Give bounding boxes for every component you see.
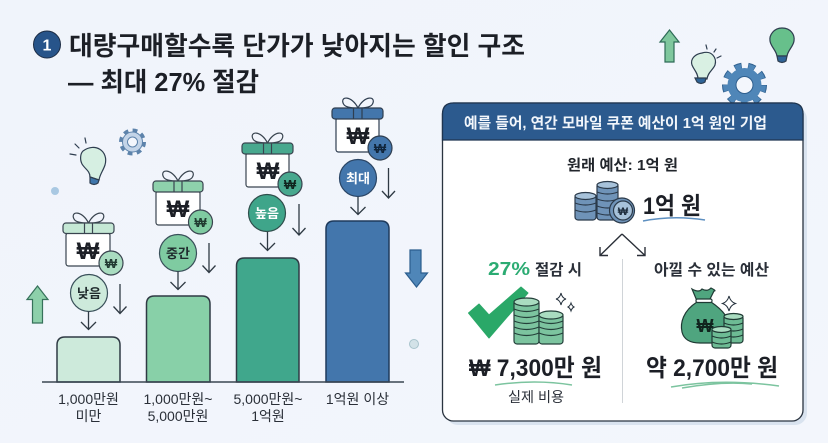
arrow: tier 2 <box>170 243 216 290</box>
icon: gift box: ₩ <box>167 196 190 223</box>
underline <box>671 382 779 388</box>
underline <box>643 218 705 221</box>
icon: coin stacks blue <box>575 182 634 223</box>
icon: sparkle <box>722 296 736 311</box>
arrow: tier 3 <box>260 204 306 250</box>
axis label: tier 1: 1,000만원 <box>58 391 119 407</box>
arrow: tier 1 <box>81 284 126 330</box>
amount: 100 million won: 1억 원 <box>643 193 701 220</box>
icon: check mark <box>468 287 528 338</box>
title line 2: — 최대 27% 절감 <box>68 67 259 97</box>
icon: gift box <box>332 98 392 160</box>
chart: discount tiers bar chart <box>42 221 404 424</box>
bar: tier 2 <box>146 296 210 382</box>
panel: example card <box>442 103 807 425</box>
icon: money bag: ₩ <box>696 316 714 336</box>
original budget label: 원래 예산: 1억 원 <box>567 157 678 174</box>
icon: sparkles <box>556 293 574 311</box>
icon: gift box: ₩ <box>374 141 387 156</box>
right column: savable budget <box>646 261 779 388</box>
gift tier 3 <box>242 133 306 250</box>
badge: high: 높음 <box>255 206 279 221</box>
icon: gear small <box>122 131 144 153</box>
badge: medium: 중간 <box>166 246 190 261</box>
card body <box>442 103 803 421</box>
underline <box>495 382 572 385</box>
heading: 27% savings: 27% <box>488 259 530 279</box>
axis label: tier 3: 5,000만원~ <box>234 391 302 407</box>
card shadow <box>446 107 807 425</box>
icon: light bulb left <box>70 138 106 184</box>
decorative dot left <box>51 187 59 195</box>
axis label: tier 1: 미만 <box>76 408 101 424</box>
icon: gift box <box>242 133 302 196</box>
gift tier 1 <box>63 213 126 330</box>
icon: coin stacks green <box>514 298 563 344</box>
caption: actual cost: 실제 비용 <box>508 389 564 405</box>
badge: maximum: 최대 <box>346 171 370 186</box>
arrow: split <box>600 234 645 256</box>
axis label: tier 4: 1억원 이상 <box>326 391 389 407</box>
icon: number badge: 1 <box>43 38 52 54</box>
left column: 27% savings <box>468 259 602 405</box>
gift tier 2 <box>153 171 216 290</box>
left column: 27% savings: 절감 시 <box>535 261 582 279</box>
axis label: tier 3: 1억원 <box>251 408 285 424</box>
icon: gift box: ₩ <box>105 256 118 271</box>
icon: arrow up top right <box>660 30 679 62</box>
icon: arrow down right <box>406 250 428 287</box>
bar: tier 4 <box>326 221 389 382</box>
icon: arrow up left <box>27 286 48 323</box>
icon: light bulb top middle <box>692 45 721 84</box>
bar: tier 3 <box>236 258 299 382</box>
icon: gift box <box>63 213 123 275</box>
gift tier 4 <box>332 98 395 214</box>
badge: low: 낮음 <box>77 286 101 301</box>
icon: gift box: ₩ <box>77 238 100 265</box>
icon: gift box: ₩ <box>257 158 280 185</box>
icon: number badge <box>34 31 60 58</box>
decorative ring <box>410 340 418 348</box>
bar: tier 1 <box>57 337 120 382</box>
amount: 73 million won: ₩ 7,300만 원 <box>469 355 602 382</box>
axis label: tier 2: 1,000만원~ <box>144 391 212 407</box>
title <box>34 31 525 97</box>
icon: gift box: ₩ <box>284 177 297 192</box>
amount: about 27 million won: 약 2,700만 원 <box>646 355 778 382</box>
title line 1: 대량구매할수록 단가가 낮아지는 할인 구조 <box>69 31 525 61</box>
icon: gift box: ₩ <box>194 215 207 230</box>
heading: savable budget: 아낄 수 있는 예산 <box>654 261 769 279</box>
icon: coin stacks blue: ₩ <box>618 206 629 218</box>
card header <box>442 103 803 140</box>
divider <box>622 259 624 403</box>
icon: gift box: ₩ <box>347 123 370 150</box>
icon: gear large <box>726 66 764 104</box>
icon: small coin stacks <box>712 314 743 348</box>
icon: gift box <box>153 171 212 234</box>
axis label: tier 2: 5,000만원 <box>148 408 208 424</box>
icon: light bulb top right <box>770 28 794 62</box>
card header: 예를 들어, 연간 모바일 쿠폰 예산이 1억 원인 기업 <box>464 115 767 132</box>
arrow: tier 4 <box>350 168 395 214</box>
